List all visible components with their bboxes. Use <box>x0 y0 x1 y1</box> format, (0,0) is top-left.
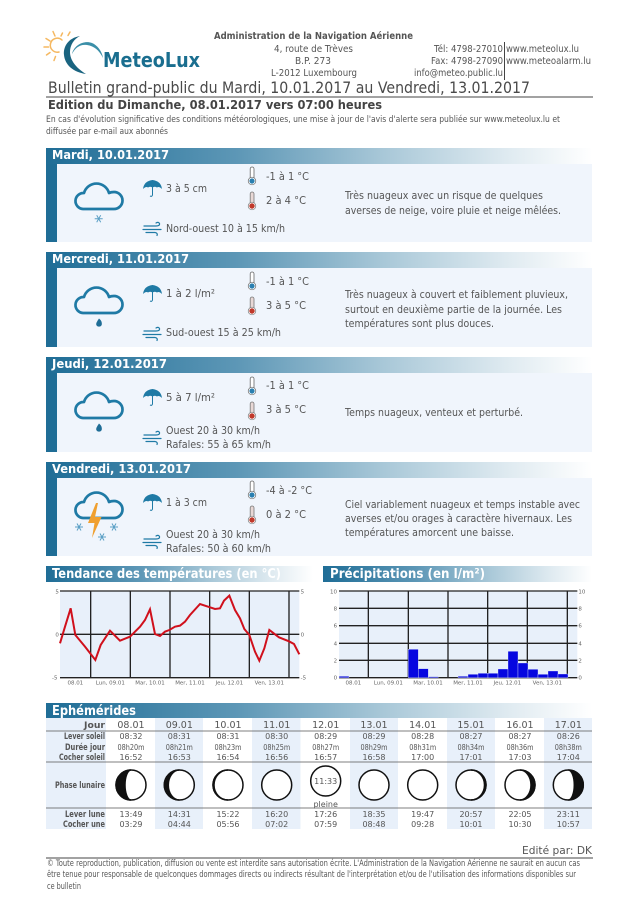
header contact block: info@meteo.public.lu <box>414 68 503 79</box>
heading: Mardi: Mardi, 10.01.2017 <box>52 148 169 162</box>
header address block <box>214 30 413 79</box>
row: sunset: 17:01 <box>459 753 483 762</box>
wind text: Rafales: 50 à 60 km/h <box>166 543 271 555</box>
header contact block: www.meteoalarm.lu <box>506 56 591 67</box>
row: day length: 08h25m <box>263 743 290 752</box>
forecast text: Ciel variablement nuageux et temps instable avec <box>345 499 580 511</box>
row labels: Lever lune <box>65 810 105 820</box>
row: moonset: 10:30 <box>508 820 532 829</box>
title: Bulletin grand-public du Mardi, 10.01.2017 au Vendredi, 13.01.2017 <box>48 78 530 97</box>
row: sunset: 17:00 <box>411 753 434 762</box>
row: dates: 11.01 <box>263 720 290 731</box>
row: dates: 17.01 <box>555 720 582 731</box>
row labels: Lever soleil <box>64 732 105 742</box>
bar chart: precipitation: 10 <box>330 589 337 595</box>
row: sunrise: 08:27 <box>459 732 483 741</box>
precipitation amount: 5 à 7 l/m² <box>166 392 215 404</box>
icon: cold thermometer <box>248 377 256 395</box>
row: moonrise: 13:49 <box>119 810 143 819</box>
line chart: temperatures: 0 <box>55 632 59 638</box>
line chart: temperatures: Mer, 11.01 <box>175 680 205 686</box>
row: moonrise: 16:20 <box>265 810 288 819</box>
row: moonrise: 19:47 <box>411 810 434 819</box>
forecast text <box>345 499 580 539</box>
bar chart: precipitation: 0 <box>578 675 582 681</box>
bar chart: precipitation: 8 <box>334 606 338 612</box>
row: day length: 08h23m <box>214 743 242 752</box>
full moon time and label: pleine <box>313 800 338 809</box>
bar chart: precipitation <box>330 589 586 686</box>
row: day length <box>118 743 582 752</box>
copyright notice <box>47 858 580 892</box>
wind text: Ouest 20 à 30 km/h <box>166 529 260 541</box>
minimum temperature: -1 à 1 °C <box>266 380 309 392</box>
row: dates: 10.01 <box>214 720 242 731</box>
row: sunrise: 08:30 <box>265 732 288 741</box>
icon: cloud with rain <box>75 393 122 432</box>
icon: wind <box>143 327 161 340</box>
row: sunrise: 08:31 <box>216 732 240 741</box>
forecast text: températures sont plus douces. <box>345 318 494 330</box>
logo wordmark: MeteoLux <box>103 48 200 72</box>
forecast text: averses et/ou orages à caractère hivernaux. Les <box>345 513 572 525</box>
table shading <box>46 718 592 829</box>
row: moonset: 10:01 <box>459 820 483 829</box>
row: moonset: 03:29 <box>119 820 143 829</box>
bar chart: precipitation: 2 <box>578 658 582 664</box>
wind text <box>166 425 271 451</box>
precipitation amount: 3 à 5 cm <box>166 183 207 195</box>
minimum temperature: -1 à 1 °C <box>266 276 309 288</box>
row: moonrise: 15:22 <box>216 810 240 819</box>
wind text: Nord-ouest 10 à 15 km/h <box>166 223 285 235</box>
row: sunset: 16:54 <box>216 753 240 762</box>
row: moonset: 07:02 <box>265 820 288 829</box>
row: moonrise: 17:26 <box>314 810 337 819</box>
icon: cloud with storm and snow <box>75 493 122 540</box>
line chart: temperatures: -5 <box>301 675 307 681</box>
row: day length: 08h34m <box>458 743 485 752</box>
row: sunset: 16:52 <box>119 753 143 762</box>
logo sun <box>44 32 70 60</box>
row: day length: 08h20m <box>118 743 145 752</box>
minimum temperature: -4 à -2 °C <box>266 485 312 497</box>
icon: umbrella <box>143 389 162 405</box>
forecast text <box>344 289 568 330</box>
icon: umbrella <box>143 180 162 196</box>
icon: hot thermometer <box>248 402 256 420</box>
row: day length: 08h38m <box>555 743 582 752</box>
row: moonset: 10:57 <box>557 820 580 829</box>
row: moonset: 05:56 <box>216 820 240 829</box>
minimum temperature: -1 à 1 °C <box>266 171 309 183</box>
icon: wind <box>143 222 161 236</box>
heading: precipitation: Précipitations (en l/m²) <box>330 567 485 582</box>
panel: precipitation <box>323 566 592 686</box>
panel: Mercredi <box>46 252 592 347</box>
line chart: temperatures: Mar, 10.01 <box>135 680 165 686</box>
intro note: En cas d'évolution significative des conditions météorologiques, une mise à jour de l'avis d'alerte sera publiée sur www.meteolux.lu et <box>46 114 560 125</box>
bar chart: precipitation: Ven, 13.01 <box>533 680 562 686</box>
row: dates: 16.01 <box>506 720 534 731</box>
row: sunset: 17:03 <box>508 753 532 762</box>
maximum temperature: 3 à 5 °C <box>266 300 306 312</box>
precipitation amount: 1 à 3 cm <box>166 497 207 509</box>
row: dates <box>117 720 582 731</box>
panel: Jeudi <box>46 357 592 452</box>
icon: hot thermometer <box>248 506 256 524</box>
row: dates: 12.01 <box>312 720 339 731</box>
maximum temperature: 3 à 5 °C <box>266 404 306 416</box>
precipitation amount: 1 à 2 l/m² <box>166 288 215 300</box>
forecast text: surtout en deuxième partie de la journée. Les <box>345 304 562 316</box>
bar chart: precipitation: Mer, 11.01 <box>453 680 483 686</box>
icon: cloud with rain <box>75 288 122 327</box>
row: moonset <box>119 820 580 829</box>
heading: Jeudi: Jeudi, 12.01.2017 <box>51 357 167 371</box>
row: moonrise: 14:31 <box>168 810 191 819</box>
bar chart: precipitation: 8 <box>578 606 582 612</box>
row: sunset: 16:57 <box>314 753 337 762</box>
line chart: temperatures: 08.01 <box>67 680 83 686</box>
icon: cold thermometer <box>248 272 256 290</box>
bar chart: precipitation: 08.01 <box>345 680 361 686</box>
icon: cold thermometer <box>248 167 256 185</box>
wind text <box>166 529 271 555</box>
header address block: L-2012 Luxembourg <box>271 68 357 79</box>
row labels: Durée jour <box>65 742 106 753</box>
row labels <box>55 721 106 830</box>
intro note <box>46 114 560 137</box>
row: sunrise: 08:29 <box>362 732 386 741</box>
line chart: temperatures: Jeu, 12.01 <box>215 680 243 686</box>
row: moonrise: 18:35 <box>362 810 386 819</box>
bar chart: precipitation: Mar, 10.01 <box>413 680 443 686</box>
panel: temperature trend <box>46 566 313 686</box>
row: sunrise: 08:32 <box>119 732 143 741</box>
row: day length: 08h36m <box>506 743 534 752</box>
wind text: Ouest 20 à 30 km/h <box>166 425 260 437</box>
line chart: temperatures <box>52 589 307 686</box>
bar chart: precipitation: 6 <box>334 624 338 630</box>
row: sunset: 16:56 <box>265 753 288 762</box>
line chart: temperatures: 5 <box>55 589 59 595</box>
bar chart: precipitation: 2 <box>334 658 337 664</box>
bar chart: precipitation: 10 <box>578 589 586 595</box>
bar chart: precipitation: 0 <box>334 675 338 681</box>
header contact block: www.meteolux.lu <box>506 44 579 55</box>
forecast text: températures amorcent une baisse. <box>345 527 514 539</box>
forecast text <box>344 190 561 217</box>
row: sunrise: 08:28 <box>411 732 434 741</box>
bar chart: precipitation: 4 <box>334 641 338 647</box>
bar chart: precipitation: 6 <box>578 624 582 630</box>
line chart: temperatures: -5 <box>52 675 58 681</box>
bar chart: precipitation: Lun, 09.01 <box>374 680 403 686</box>
header contact block: Fax: 4798-27090 <box>431 56 503 67</box>
row labels: Cocher soleil <box>59 753 105 763</box>
row: sunrise: 08:29 <box>314 732 337 741</box>
row: moonset: 04:44 <box>168 820 191 829</box>
copyright notice: ce bulletin <box>47 882 81 892</box>
icon: hot thermometer <box>248 192 256 210</box>
heading: Vendredi: Vendredi, 13.01.2017 <box>52 462 191 476</box>
edition subtitle: Edition du Dimanche, 08.01.2017 vers 07:00 heures <box>48 98 382 112</box>
logo swoosh <box>64 36 103 74</box>
maximum temperature: 0 à 2 °C <box>266 509 306 521</box>
header contact block: Tél: 4798-27010 <box>433 43 503 55</box>
row: day length: 08h21m <box>166 743 193 752</box>
heading: temperature trend: Tendance des températures (en °C) <box>52 567 281 582</box>
line chart: temperatures: 0 <box>301 632 305 638</box>
full moon time and label: 11:33 <box>314 777 337 786</box>
maximum temperature: 2 à 4 °C <box>266 195 306 207</box>
icon: hot thermometer <box>248 297 256 315</box>
row: moonrise: 23:11 <box>557 810 580 819</box>
forecast text: Temps nuageux, venteux et perturbé. <box>344 407 523 419</box>
forecast text: Très nuageux à couvert et faiblement pluvieux, <box>344 289 568 301</box>
heading: Mercredi: Mercredi, 11.01.2017 <box>52 252 189 266</box>
row labels: Cocher une <box>63 820 105 830</box>
row: sunset: 16:58 <box>362 753 386 762</box>
header address block: B.P. 273 <box>295 56 331 67</box>
heading: ephemerides: Ephémérides <box>52 704 136 719</box>
icon: wind <box>143 431 161 444</box>
row labels: Phase lunaire <box>55 781 105 791</box>
forecast text: averses de neige, voire pluie et neige mêlées. <box>345 205 561 217</box>
header address block: 4, route de Trèves <box>274 43 353 55</box>
row: sunrise: 08:26 <box>557 732 580 741</box>
panel: Vendredi <box>46 462 592 556</box>
row labels: Jour <box>83 721 106 731</box>
row: dates: 08.01 <box>117 720 145 731</box>
panel: Mardi <box>46 148 592 242</box>
forecast text: Très nuageux avec un risque de quelques <box>344 190 543 202</box>
header logo: MeteoLux <box>44 32 200 74</box>
row: moon phases <box>116 766 583 800</box>
row: sunset: 17:04 <box>557 753 580 762</box>
row: day length: 08h27m <box>312 743 339 752</box>
row: sunrise: 08:27 <box>508 732 532 741</box>
row: sunrise: 08:31 <box>168 732 191 741</box>
row: sunset <box>119 753 580 762</box>
header contact block <box>414 42 591 80</box>
row: dates: 09.01 <box>166 720 193 731</box>
intro note: diffusée par e-mail aux abonnés <box>46 126 168 137</box>
row: sunrise <box>119 732 580 741</box>
row: day length: 08h29m <box>360 743 388 752</box>
line chart: temperatures: Ven, 13.01 <box>255 680 284 686</box>
icon: wind <box>143 535 161 548</box>
row: sunset: 16:53 <box>168 753 191 762</box>
row: moonrise <box>119 810 580 819</box>
line chart: temperatures: Lun, 09.01 <box>96 680 125 686</box>
icon: cold thermometer <box>248 481 256 499</box>
editor credit: Edité par: DK <box>522 845 593 857</box>
row: moonrise: 22:05 <box>508 810 532 819</box>
row: moonrise: 20:57 <box>459 810 483 819</box>
row: moonset: 08:48 <box>362 820 386 829</box>
header address block: Administration de la Navigation Aérienne <box>214 30 413 42</box>
icon: umbrella <box>143 494 162 510</box>
wind text: Sud-ouest 15 à 25 km/h <box>166 327 281 339</box>
row: moonset: 09:28 <box>411 820 434 829</box>
full moon time and label <box>313 777 338 809</box>
panel: ephemerides <box>46 703 592 830</box>
row: day length: 08h31m <box>409 743 436 752</box>
bar chart: precipitation: Jeu, 12.01 <box>493 680 521 686</box>
row: moonset: 07:59 <box>314 820 337 829</box>
line chart: temperatures: 5 <box>301 589 305 595</box>
row: dates: 14.01 <box>409 720 436 731</box>
row: dates: 13.01 <box>360 720 388 731</box>
icon: cloud with snow <box>75 184 122 222</box>
wind text: Rafales: 55 à 65 km/h <box>166 439 271 451</box>
bar chart: precipitation: 4 <box>578 641 582 647</box>
icon: umbrella <box>143 285 162 301</box>
row: dates: 15.01 <box>457 720 485 731</box>
